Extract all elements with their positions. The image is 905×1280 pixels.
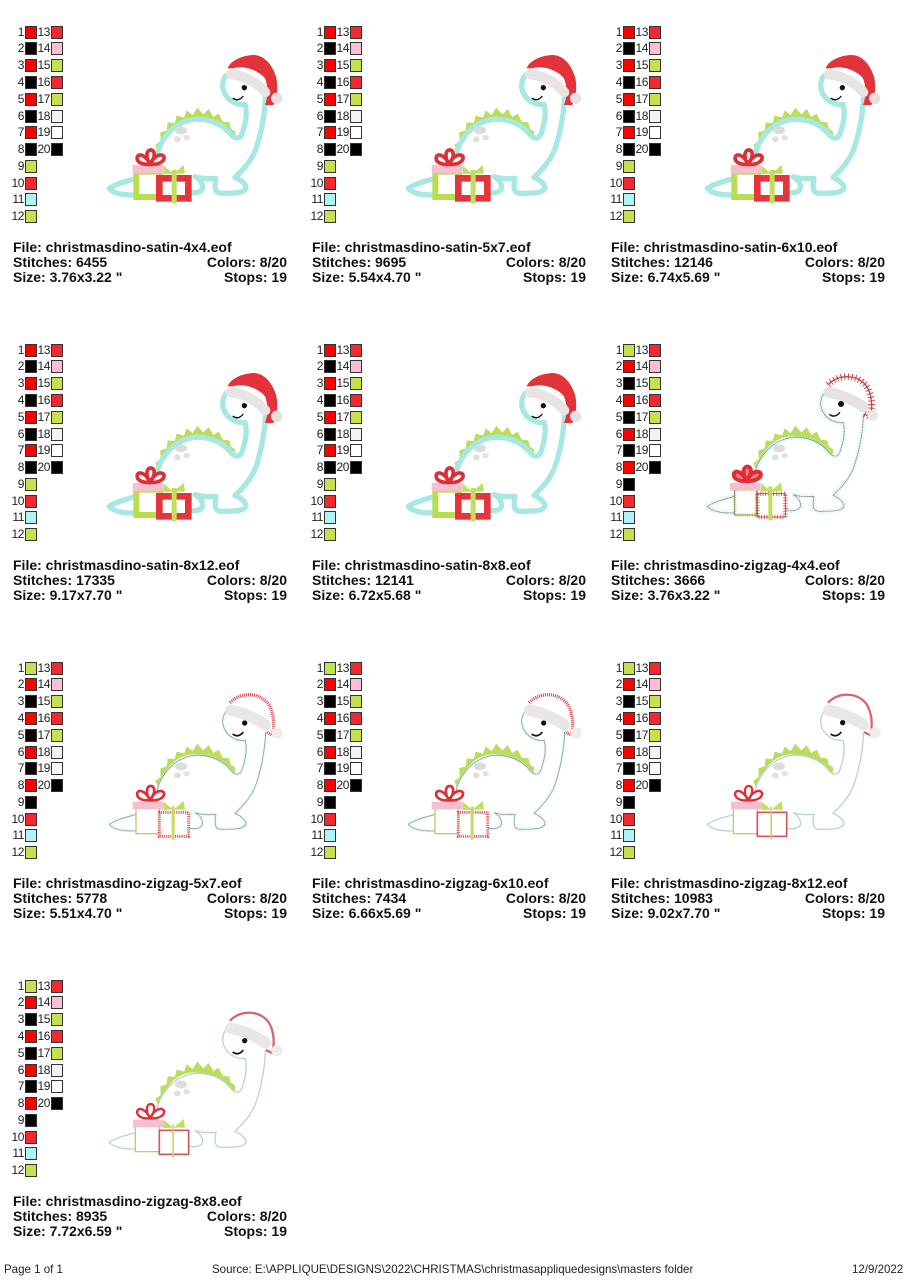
panel: satin 8x8 [310,343,586,603]
colour legend: 8 [18,778,24,792]
colour legend: 6 [616,109,622,123]
colour legend: 8 [317,142,323,156]
colour legend: 15 [37,1012,50,1026]
file details: Stitches: 8935 [13,1208,107,1224]
colour legend: 16 [336,393,349,407]
file details [13,1193,287,1239]
file details: Stitches: 17335 [13,572,115,588]
colour legend: 20 [336,460,349,474]
colour legend: 12 [310,209,323,223]
colour legend: 7 [317,761,323,775]
colour legend: 10 [310,176,323,190]
file details: Stops: 19 [822,587,885,603]
file details [312,557,586,603]
file details: Stops: 19 [224,587,287,603]
colour legend: 5 [317,410,323,424]
colour legend: 12 [609,845,622,859]
colour legend: 15 [336,58,349,72]
file details: Stitches: 7434 [312,890,406,906]
colour legend: 16 [336,711,349,725]
colour legend: 7 [317,125,323,139]
colour legend: 11 [311,828,323,842]
colour legend: 3 [616,694,622,708]
file details: Size: 6.74x5.69 " [611,269,720,285]
colour legend: 11 [610,510,622,524]
colour legend: 16 [336,75,349,89]
colour legend: 19 [336,761,349,775]
file details [611,557,885,603]
colour legend: 14 [635,677,648,691]
file details: Stitches: 5778 [13,890,107,906]
colour legend: 3 [317,58,323,72]
colour legend: 3 [18,694,24,708]
colour legend: 4 [317,711,323,725]
colour legend [609,661,661,859]
file details: Stops: 19 [224,1223,287,1239]
colour legend: 7 [317,443,323,457]
colour legend: 9 [18,159,24,173]
colour legend: 8 [616,778,622,792]
footer: page number: Page 1 of 1 [4,1264,63,1276]
file details: File: christmasdino-zigzag-4x4.eof [611,557,840,573]
colour legend: 2 [317,359,323,373]
colour legend: 2 [317,41,323,55]
icon: zigzag dinosaur design [706,373,878,520]
colour legend: 1 [616,25,622,39]
colour legend: 13 [37,25,50,39]
colour legend: 4 [616,393,622,407]
colour legend: 13 [336,25,349,39]
icon: zigzag dinosaur design [108,693,282,840]
colour legend: 20 [635,778,648,792]
colour legend: 1 [18,343,24,357]
colour legend: 17 [635,728,648,742]
colour legend: 18 [37,109,50,123]
colour legend: 13 [37,979,50,993]
colour legend: 19 [635,761,648,775]
colour legend: 5 [18,1046,24,1060]
colour legend: 4 [18,393,24,407]
colour legend [11,661,63,859]
colour legend: 10 [609,494,622,508]
colour legend: 17 [635,92,648,106]
icon: zigzag dinosaur design [706,694,880,840]
colour legend: 19 [37,761,50,775]
colour legend: 9 [317,159,323,173]
colour legend: 20 [635,142,648,156]
colour legend: 3 [317,694,323,708]
file details [312,875,586,921]
file details: File: christmasdino-satin-8x8.eof [312,557,531,573]
colour legend: 2 [616,677,622,691]
file details: Stitches: 3666 [611,572,705,588]
file details: File: christmasdino-satin-5x7.eof [312,239,531,255]
file details: Stops: 19 [523,269,586,285]
colour legend: 17 [37,410,50,424]
file details: Size: 9.02x7.70 " [611,905,720,921]
file details: Size: 6.66x5.69 " [312,905,421,921]
colour legend: 8 [616,460,622,474]
colour legend [609,25,661,223]
colour legend: 13 [635,343,648,357]
colour legend: 15 [635,376,648,390]
icon: satin dinosaur design [106,55,282,204]
file details: Colors: 8/20 [207,254,287,270]
colour legend: 10 [11,176,24,190]
colour legend: 9 [616,477,622,491]
colour legend: 14 [635,41,648,55]
panel: zigzag 4x4 [609,343,885,603]
colour legend: 16 [635,711,648,725]
colour legend: 20 [635,460,648,474]
colour legend: 9 [18,795,24,809]
colour legend: 4 [18,711,24,725]
colour legend: 6 [317,427,323,441]
colour legend: 1 [18,979,24,993]
colour legend [11,25,63,223]
colour legend: 7 [18,443,24,457]
colour legend [310,25,362,223]
colour legend: 8 [18,142,24,156]
colour legend: 11 [311,192,323,206]
footer: source path: Source: E:\APPLIQUE\DESIGNS\2022\CHRISTMAS\christmasappliquedesigns\masters folder [212,1264,693,1276]
colour legend: 17 [37,92,50,106]
colour legend: 16 [635,75,648,89]
colour legend: 3 [18,376,24,390]
colour legend: 1 [616,343,622,357]
file details: Size: 3.76x3.22 " [611,587,720,603]
colour legend: 10 [11,494,24,508]
colour legend: 12 [11,209,24,223]
colour legend [310,661,362,859]
colour legend: 4 [18,75,24,89]
colour legend: 3 [616,376,622,390]
colour legend: 12 [11,1163,24,1177]
colour legend: 18 [336,109,349,123]
colour legend: 5 [317,728,323,742]
colour legend: 2 [616,359,622,373]
colour legend: 11 [12,510,24,524]
file details: File: christmasdino-zigzag-8x12.eof [611,875,848,891]
file details: Colors: 8/20 [506,572,586,588]
colour legend: 4 [616,75,622,89]
colour legend: 18 [635,745,648,759]
colour legend [11,343,63,541]
file details: Colors: 8/20 [207,1208,287,1224]
file details [611,239,885,285]
panel: satin 6x10 [609,25,885,285]
colour legend: 1 [18,661,24,675]
colour legend: 11 [12,828,24,842]
colour legend: 2 [18,41,24,55]
colour legend: 10 [310,812,323,826]
colour legend: 7 [616,125,622,139]
colour legend: 4 [317,393,323,407]
colour legend: 14 [37,41,50,55]
file details: Size: 3.76x3.22 " [13,269,122,285]
icon: satin dinosaur design [406,55,582,204]
colour legend: 6 [317,109,323,123]
colour legend: 14 [336,359,349,373]
colour legend: 14 [37,995,50,1009]
colour legend: 19 [37,443,50,457]
icon: satin dinosaur design [106,373,282,522]
colour legend: 16 [37,1029,50,1043]
colour legend: 3 [317,376,323,390]
colour legend: 11 [12,192,24,206]
file details: Stops: 19 [224,269,287,285]
colour legend: 7 [18,1079,24,1093]
colour legend: 12 [310,845,323,859]
colour legend: 19 [37,1079,50,1093]
colour legend: 16 [37,711,50,725]
colour legend: 10 [609,176,622,190]
file details: Stitches: 12141 [312,572,414,588]
file details: Size: 7.72x6.59 " [13,1223,122,1239]
colour legend: 3 [616,58,622,72]
panel: zigzag 6x10 [310,661,586,921]
panel: zigzag 8x12 [609,661,885,921]
colour legend: 2 [18,677,24,691]
colour legend: 9 [317,477,323,491]
colour legend: 10 [11,1130,24,1144]
colour legend: 19 [336,125,349,139]
file details: Stitches: 6455 [13,254,107,270]
colour legend: 11 [610,828,622,842]
file details: Colors: 8/20 [506,254,586,270]
file details: Colors: 8/20 [805,254,885,270]
colour legend: 7 [616,443,622,457]
colour legend: 18 [635,427,648,441]
colour legend: 8 [317,460,323,474]
colour legend: 12 [609,527,622,541]
colour legend: 6 [18,745,24,759]
file details: Stops: 19 [523,905,586,921]
file details: Colors: 8/20 [207,890,287,906]
colour legend [310,343,362,541]
colour legend: 13 [635,25,648,39]
colour legend: 5 [317,92,323,106]
colour legend: 8 [616,142,622,156]
file details: File: christmasdino-zigzag-6x10.eof [312,875,548,891]
file details [13,239,287,285]
file details: Size: 5.51x4.70 " [13,905,122,921]
file details [611,875,885,921]
colour legend: 18 [37,745,50,759]
colour legend: 14 [336,677,349,691]
colour legend: 20 [336,778,349,792]
colour legend: 13 [635,661,648,675]
colour legend: 19 [635,443,648,457]
file details [312,239,586,285]
file details [13,557,287,603]
colour legend: 17 [37,1046,50,1060]
colour legend: 8 [317,778,323,792]
colour legend: 1 [616,661,622,675]
colour legend: 12 [310,527,323,541]
colour legend: 20 [336,142,349,156]
colour legend: 6 [317,745,323,759]
colour legend: 12 [609,209,622,223]
colour legend: 20 [37,142,50,156]
colour legend: 14 [336,41,349,55]
colour legend: 18 [336,745,349,759]
file details [13,875,287,921]
panel: zigzag 5x7 [11,661,287,921]
colour legend: 6 [18,1063,24,1077]
colour legend: 11 [311,510,323,524]
icon: zigzag dinosaur design [408,693,582,840]
file details: Size: 5.54x4.70 " [312,269,421,285]
colour legend: 6 [18,109,24,123]
colour legend: 5 [616,410,622,424]
colour legend: 16 [37,75,50,89]
colour legend: 6 [616,427,622,441]
colour legend: 9 [18,477,24,491]
colour legend: 1 [18,25,24,39]
file details: Colors: 8/20 [805,890,885,906]
colour legend: 20 [37,460,50,474]
colour legend: 19 [635,125,648,139]
colour legend: 6 [616,745,622,759]
colour legend: 18 [635,109,648,123]
colour legend: 15 [37,58,50,72]
colour legend: 11 [610,192,622,206]
colour legend: 1 [317,343,323,357]
colour legend: 16 [635,393,648,407]
colour legend: 3 [18,58,24,72]
colour legend: 7 [18,761,24,775]
colour legend: 8 [18,460,24,474]
panel: satin 8x12 [11,343,287,603]
panel: satin 4x4 [11,25,287,285]
file details: Stitches: 9695 [312,254,406,270]
colour legend: 5 [616,728,622,742]
colour legend: 15 [37,694,50,708]
icon: zigzag dinosaur design [108,1012,282,1158]
file details: File: christmasdino-zigzag-5x7.eof [13,875,242,891]
colour legend: 12 [11,845,24,859]
colour legend: 4 [616,711,622,725]
colour legend: 8 [18,1096,24,1110]
file details: Stitches: 10983 [611,890,713,906]
colour legend: 13 [336,343,349,357]
colour legend: 15 [336,694,349,708]
colour legend: 5 [18,92,24,106]
colour legend: 19 [336,443,349,457]
colour legend: 18 [37,427,50,441]
colour legend: 2 [616,41,622,55]
panel: zigzag 8x8 [11,979,287,1239]
panel: satin 5x7 [310,25,586,285]
colour legend: 9 [616,159,622,173]
colour legend: 10 [609,812,622,826]
colour legend: 15 [336,376,349,390]
colour legend: 9 [616,795,622,809]
colour legend: 14 [37,677,50,691]
colour legend: 17 [336,410,349,424]
colour legend: 12 [11,527,24,541]
icon: satin dinosaur design [704,55,880,204]
colour legend: 4 [18,1029,24,1043]
colour legend: 17 [336,92,349,106]
colour legend: 13 [37,343,50,357]
file details: Size: 9.17x7.70 " [13,587,122,603]
colour legend: 4 [317,75,323,89]
colour legend: 17 [635,410,648,424]
colour legend: 19 [37,125,50,139]
file details: Colors: 8/20 [805,572,885,588]
colour legend: 14 [37,359,50,373]
colour legend: 20 [37,778,50,792]
colour legend: 7 [18,125,24,139]
colour legend: 1 [317,661,323,675]
colour legend: 18 [336,427,349,441]
colour legend: 9 [18,1113,24,1127]
file details: Stops: 19 [822,269,885,285]
icon: satin dinosaur design [406,373,582,522]
file details: Colors: 8/20 [207,572,287,588]
colour legend: 11 [12,1146,24,1160]
colour legend: 2 [317,677,323,691]
colour legend: 3 [18,1012,24,1026]
colour legend: 2 [18,359,24,373]
colour legend: 18 [37,1063,50,1077]
colour legend: 15 [37,376,50,390]
colour legend [11,979,63,1177]
colour legend [609,343,661,541]
colour legend: 1 [317,25,323,39]
file details: Stops: 19 [822,905,885,921]
colour legend: 14 [635,359,648,373]
colour legend: 9 [317,795,323,809]
colour legend: 10 [310,494,323,508]
colour legend: 15 [635,58,648,72]
colour legend: 17 [336,728,349,742]
colour legend: 10 [11,812,24,826]
file details: Stitches: 12146 [611,254,713,270]
file details: File: christmasdino-satin-8x12.eof [13,557,239,573]
colour legend: 13 [336,661,349,675]
file details: Size: 6.72x5.68 " [312,587,421,603]
file details: File: christmasdino-zigzag-8x8.eof [13,1193,242,1209]
colour legend: 2 [18,995,24,1009]
colour legend: 20 [37,1096,50,1110]
file details: Colors: 8/20 [506,890,586,906]
colour legend: 5 [18,410,24,424]
colour legend: 5 [616,92,622,106]
colour legend: 15 [635,694,648,708]
file details: Stops: 19 [224,905,287,921]
footer: date: 12/9/2022 [852,1264,903,1276]
file details: Stops: 19 [523,587,586,603]
colour legend: 13 [37,661,50,675]
file details: File: christmasdino-satin-6x10.eof [611,239,837,255]
colour legend: 5 [18,728,24,742]
colour legend: 7 [616,761,622,775]
file details: File: christmasdino-satin-4x4.eof [13,239,232,255]
colour legend: 17 [37,728,50,742]
colour legend: 16 [37,393,50,407]
colour legend: 6 [18,427,24,441]
